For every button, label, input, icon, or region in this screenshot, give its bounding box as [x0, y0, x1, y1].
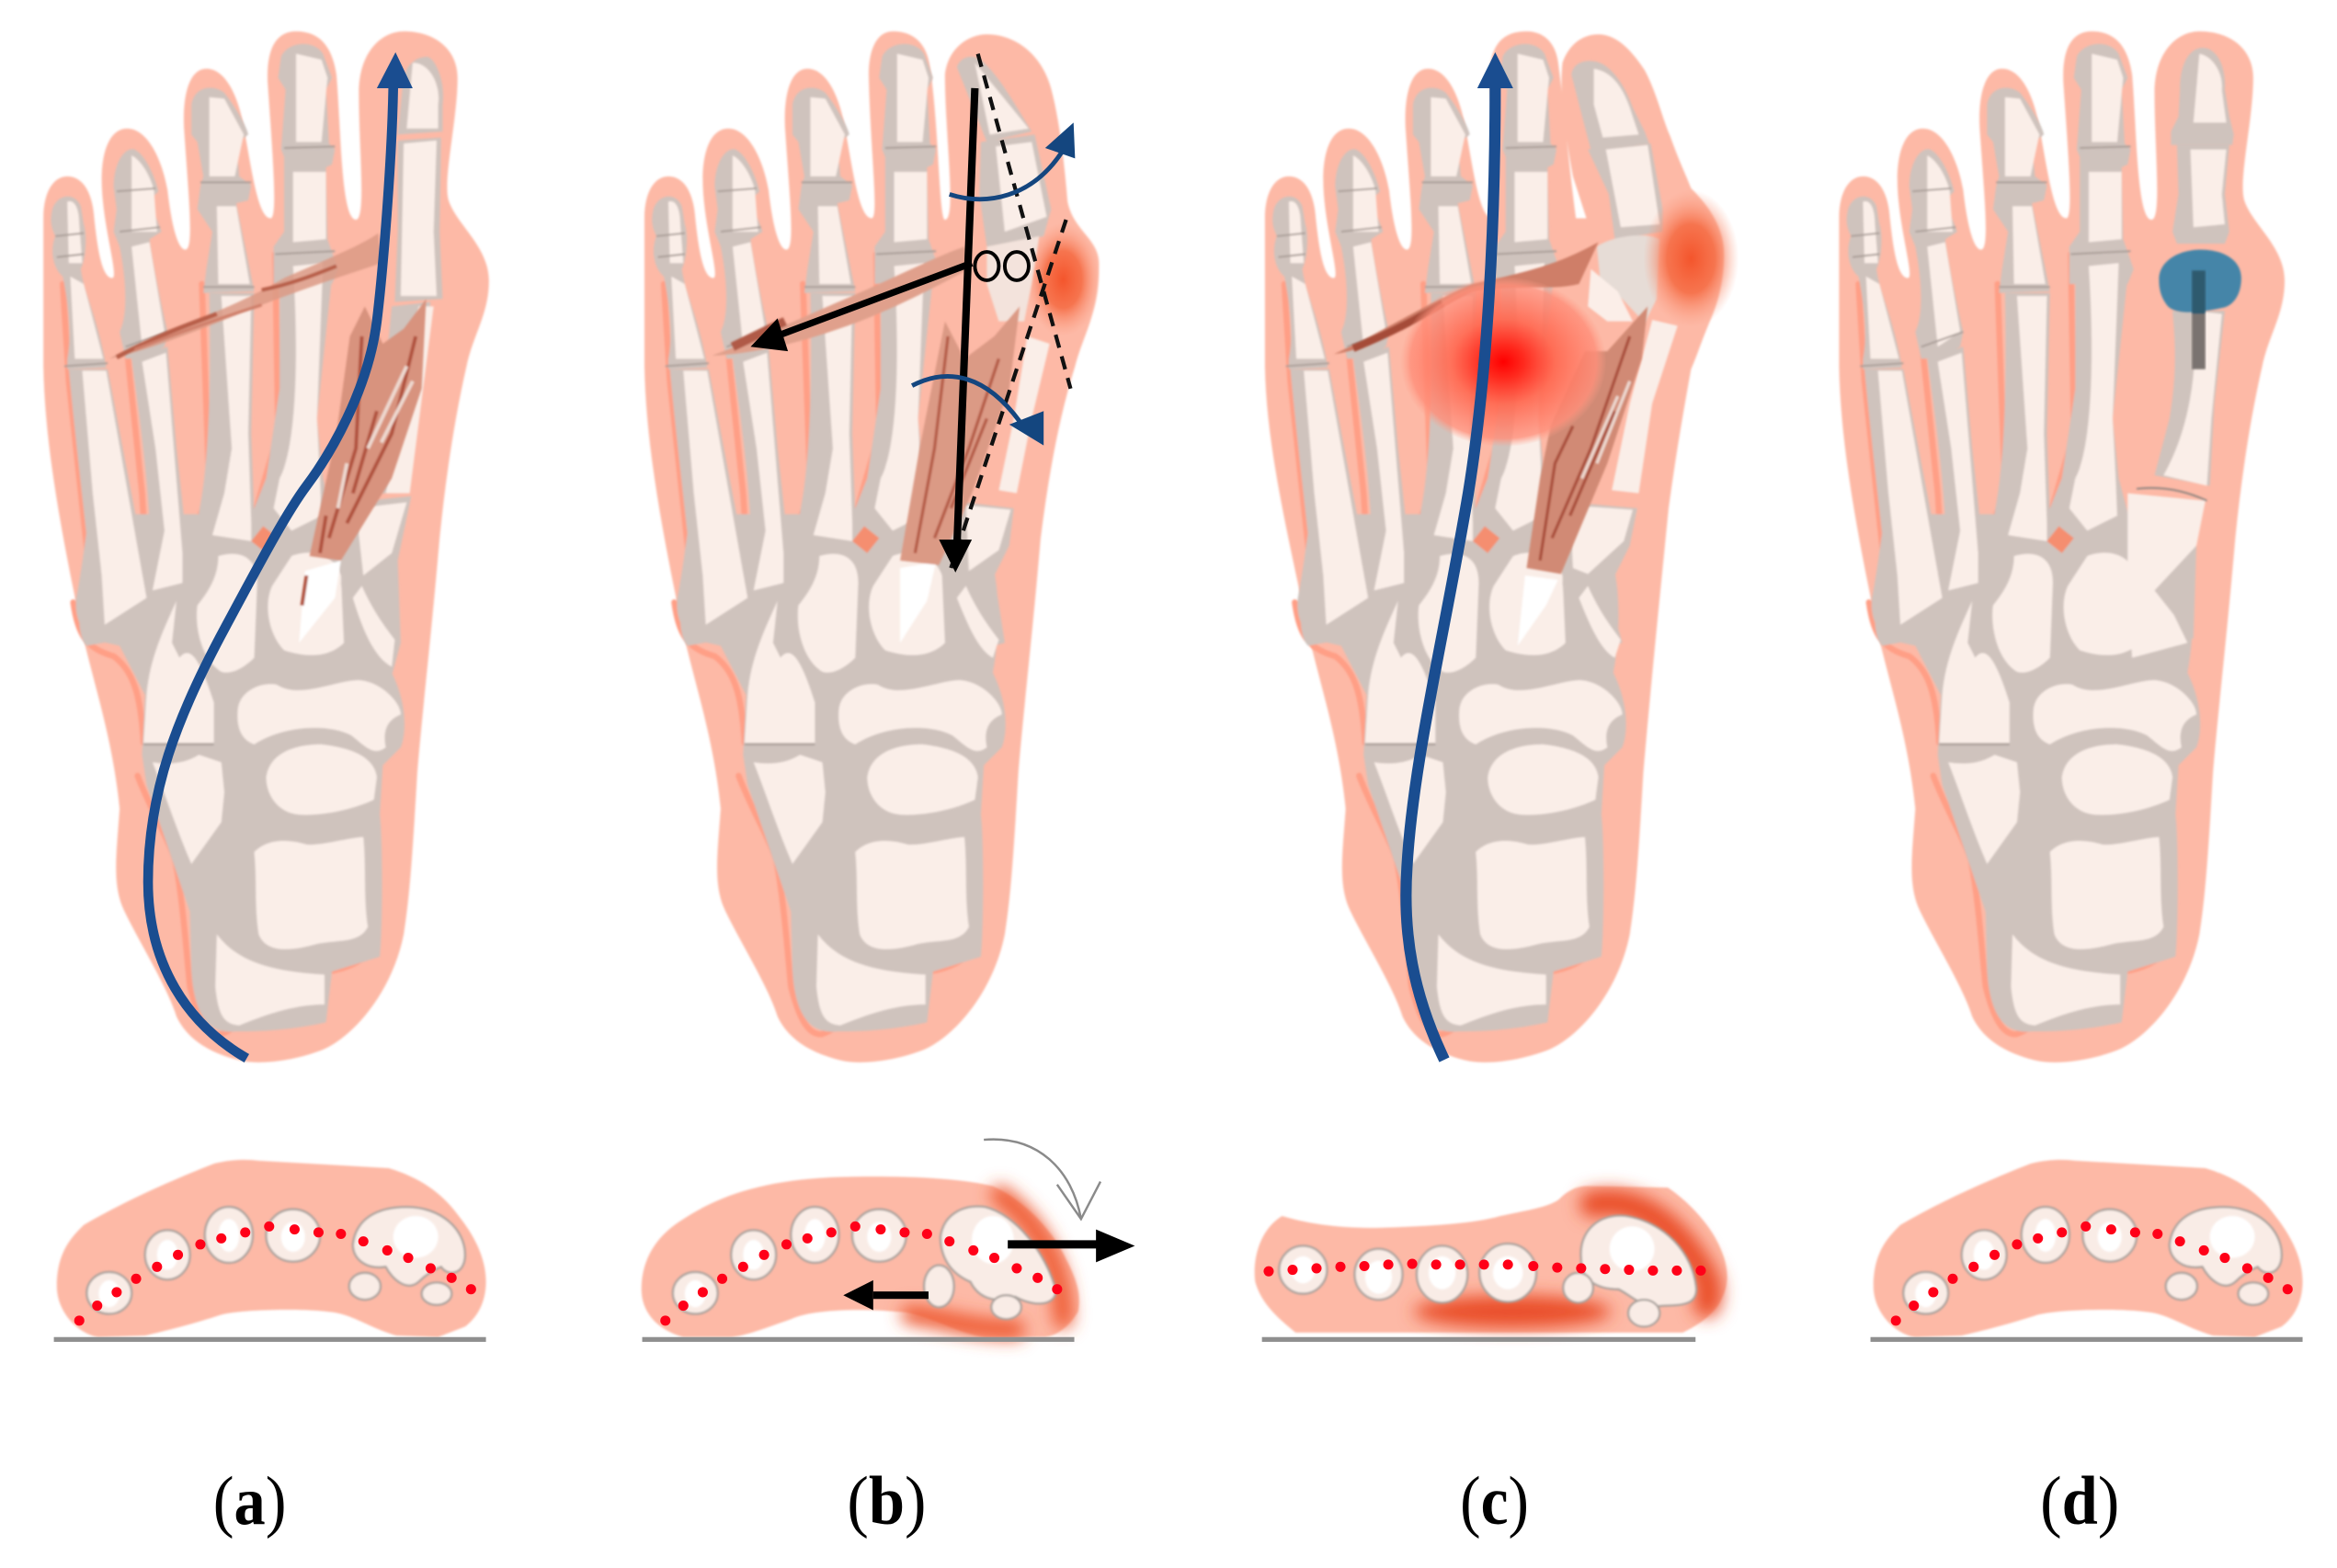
ground line c — [1262, 1337, 1695, 1342]
inflammation: bunion c — [1643, 190, 1738, 327]
sesamoid circles b — [975, 252, 1029, 280]
skin outline c — [1265, 31, 1724, 1062]
black splay arrows b — [843, 1230, 1134, 1310]
implant stem d — [2192, 270, 2206, 369]
black force lines b — [750, 88, 975, 573]
red joint dots c — [1263, 1259, 1705, 1277]
blue rotation arrows b — [912, 122, 1075, 446]
skeleton c — [1272, 44, 1678, 1034]
cross-section b — [642, 1140, 1134, 1337]
bones section a — [86, 1207, 465, 1314]
thin grey rotation arrow b — [984, 1140, 1100, 1219]
ground line a — [54, 1337, 486, 1342]
panel: foot d, corrected with implant — [1839, 31, 2285, 1062]
panel: foot c, pain and bunion — [1265, 31, 1738, 1062]
skeleton b — [652, 44, 1051, 1034]
label: (a): (a) — [213, 1463, 286, 1540]
skin outline a — [43, 31, 489, 1062]
implant cap d — [2159, 250, 2241, 312]
cross-section a — [57, 1160, 486, 1337]
muscles a — [109, 233, 427, 642]
red joint dots a — [74, 1221, 476, 1325]
skin outline b — [644, 31, 1099, 1062]
label: (b): (b) — [847, 1463, 927, 1540]
label: (d): (d) — [2040, 1463, 2119, 1540]
bones section b — [673, 1207, 1055, 1319]
inflammation section b — [910, 1195, 1063, 1330]
ground line d — [1871, 1337, 2303, 1342]
inflamed bunion b — [1026, 222, 1100, 336]
label: (c): (c) — [1460, 1463, 1529, 1540]
muscles b — [712, 246, 1020, 642]
ground line b — [643, 1337, 1075, 1342]
skeleton d — [1847, 44, 2234, 1034]
load line arrow a — [148, 52, 413, 1058]
inflammation: forefoot pain c — [1400, 277, 1607, 447]
bones section d — [1903, 1207, 2282, 1314]
panel: foot a, normal foot with blue load line — [43, 31, 489, 1062]
skeleton a — [51, 44, 443, 1034]
muscles c — [1334, 242, 1647, 646]
panel: foot b, hallux valgus deforming forces — [644, 31, 1100, 1062]
red joint dots b — [660, 1221, 1062, 1325]
bones section c — [1279, 1216, 1696, 1326]
load line arrow c — [1406, 52, 1513, 1060]
dashed axes b — [951, 54, 1070, 568]
red joint dots d — [1891, 1221, 2293, 1325]
cross-section d — [1874, 1160, 2303, 1337]
cross-section c — [1255, 1186, 1727, 1333]
inflammation section c — [1414, 1202, 1709, 1328]
skin outline d — [1839, 31, 2285, 1062]
